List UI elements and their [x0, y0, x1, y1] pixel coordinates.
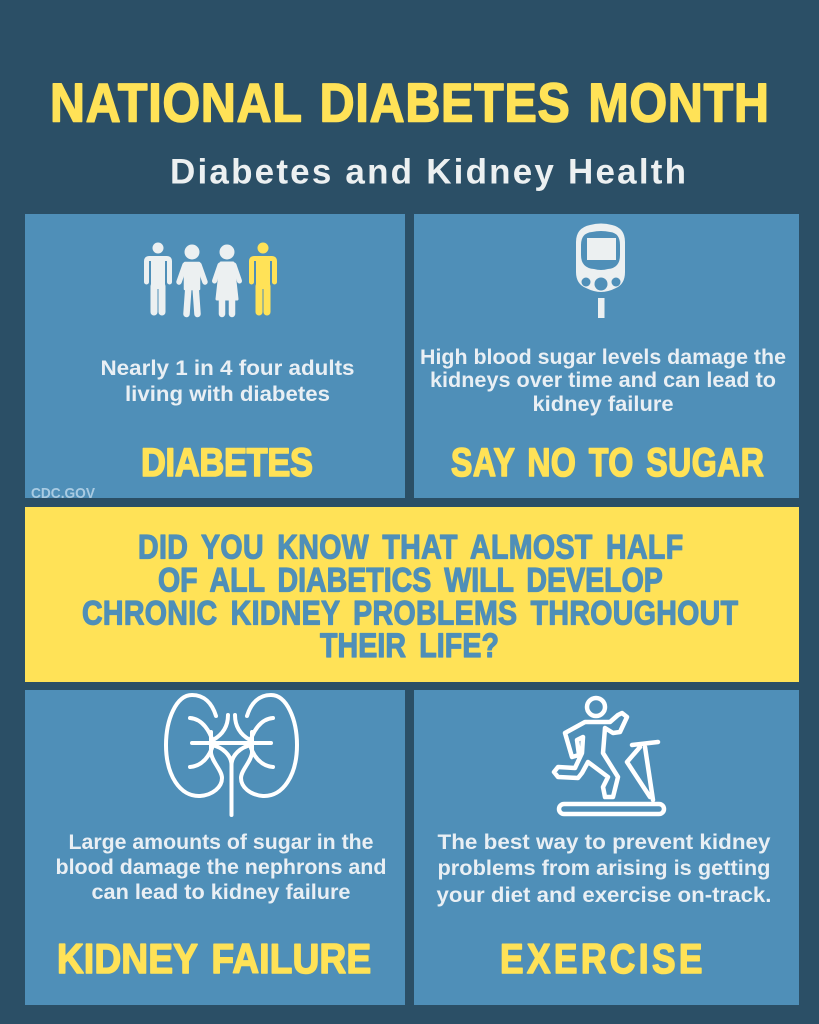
text: exercise explanation: The best way to prevent kidney	[438, 831, 771, 854]
title: NATIONAL DIABETES MONTH	[50, 72, 769, 133]
callout: did you know	[25, 507, 799, 682]
panel: kidney failure	[25, 690, 405, 1005]
text: kidney explanation: can lead to kidney failure	[92, 881, 350, 904]
callout: did you know: DID YOU KNOW THAT ALMOST HALF	[138, 528, 683, 566]
panel: say no to sugar	[414, 214, 799, 498]
text: sugar explanation: kidneys over time and can lead to	[430, 369, 776, 392]
text: exercise explanation: your diet and exercise on-track.	[436, 884, 772, 907]
callout: did you know: OF ALL DIABETICS WILL DEVELOP	[158, 561, 663, 599]
subtitle: Diabetes and Kidney Health	[170, 152, 686, 192]
text: sugar explanation	[420, 346, 786, 416]
text: diabetes stat	[100, 357, 354, 406]
text: sugar explanation: kidney failure	[532, 393, 674, 416]
source: cdc.gov: CDC.GOV	[31, 485, 95, 502]
icon: glucose meter	[576, 224, 625, 318]
text: kidney explanation: blood damage the nephrons and	[56, 856, 386, 879]
icon: four people	[146, 242, 274, 314]
panel: exercise	[414, 690, 799, 1005]
text: kidney explanation: Large amounts of sugar in the	[68, 831, 374, 854]
callout: did you know: THEIR LIFE?	[320, 627, 499, 665]
text: diabetes stat: living with diabetes	[125, 383, 330, 406]
heading: kidney failure: KIDNEY FAILURE	[57, 936, 371, 983]
heading: exercise: EXERCISE	[500, 936, 702, 983]
text: diabetes stat: Nearly 1 in 4 four adults	[100, 357, 354, 380]
text: sugar explanation: High blood sugar levels damage the	[420, 346, 786, 369]
text: kidney explanation	[56, 831, 386, 904]
text: exercise explanation: problems from arising is getting	[438, 857, 770, 880]
heading: say no to sugar: SAY NO TO SUGAR	[451, 440, 764, 485]
text: exercise explanation	[436, 831, 772, 907]
icon: kidneys	[166, 695, 297, 815]
heading: diabetes: DIABETES	[141, 440, 313, 485]
icon: treadmill runner	[554, 698, 664, 814]
panel: diabetes	[25, 214, 405, 502]
callout: did you know: CHRONIC KIDNEY PROBLEMS THROUGHOUT	[82, 594, 738, 632]
